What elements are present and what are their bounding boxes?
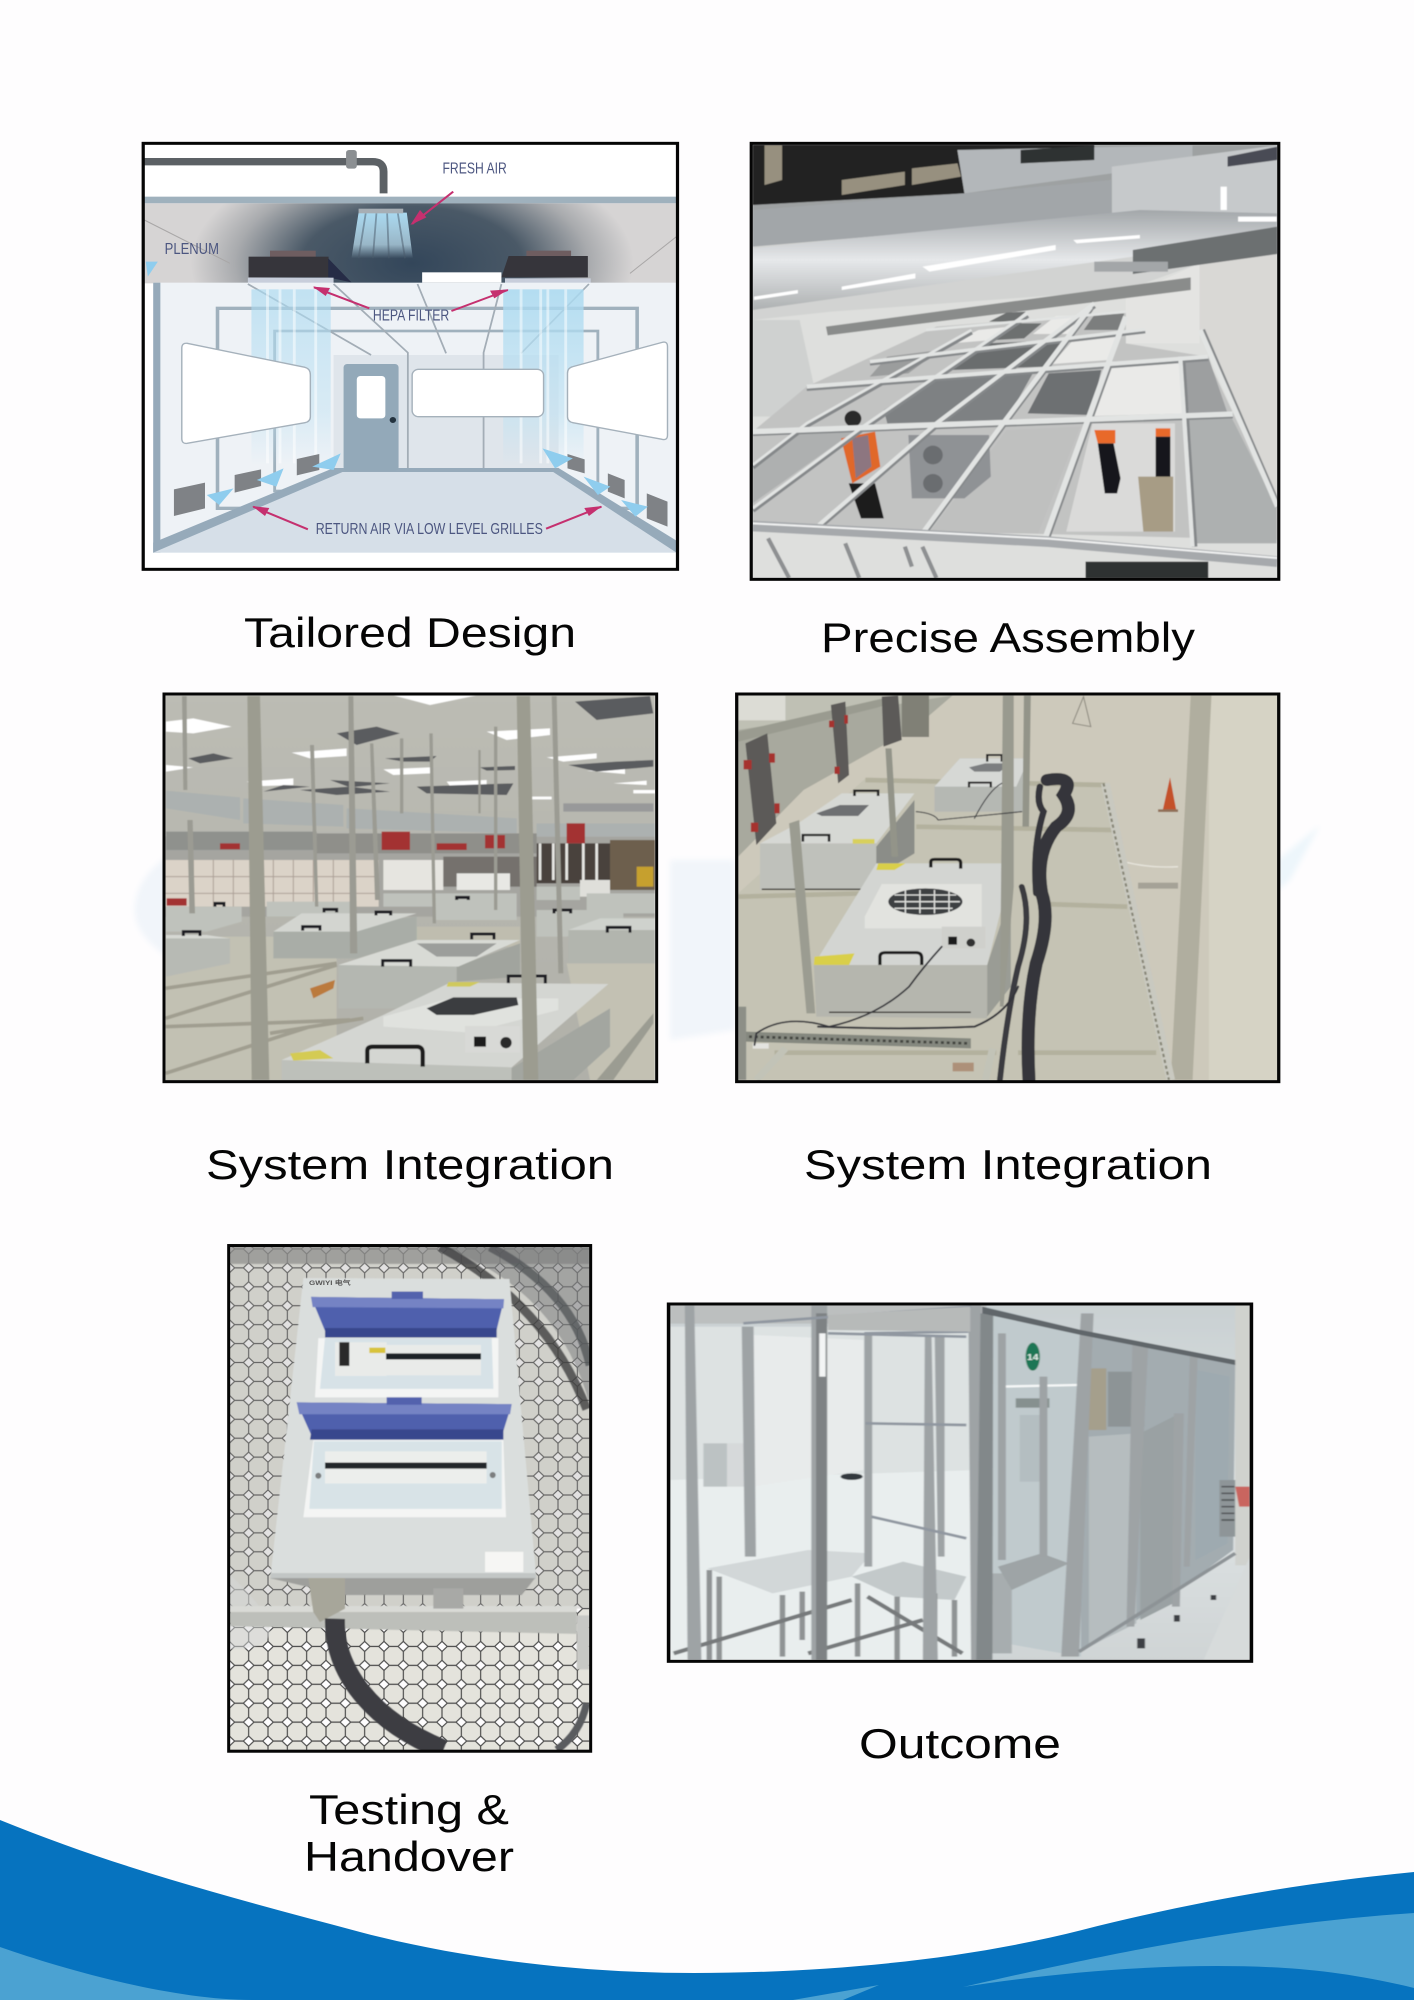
- bundled cables: [755, 779, 1068, 1080]
- background watermark: [135, 823, 1320, 1054]
- diagram labels: HEPA FILTER: [373, 306, 449, 325]
- footer wave: [0, 1820, 1414, 2000]
- caption: Testing and Handover: Testing &: [309, 1786, 509, 1833]
- aluminium grid profiles: [753, 303, 1277, 547]
- front filter unit: [814, 965, 987, 1018]
- photo: fan filter units in factory hall: [164, 694, 657, 1082]
- photo: finished softwall cleanroom: [669, 1304, 1251, 1661]
- cells seen through the grid: [753, 312, 1277, 540]
- far filter unit: [934, 758, 1029, 812]
- foreground filter unit: [336, 1062, 512, 1080]
- photo: fan filter units with cabling: [737, 694, 1279, 1082]
- ceiling services: [752, 145, 1277, 210]
- return grilles: [174, 454, 667, 527]
- caption: Testing and Handover: [304, 1786, 514, 1880]
- aluminium grid shadow: [753, 306, 1279, 547]
- door: [344, 364, 399, 471]
- diagram labels: RETURN AIR VIA LOW LEVEL GRILLES: [316, 520, 543, 538]
- maker logo: GWIYI 电气: [309, 1279, 351, 1287]
- caption: Precise Assembly: Precise Assembly: [821, 614, 1195, 661]
- caption: Testing and Handover: Handover: [304, 1833, 514, 1880]
- caption: Tailored Design: Tailored Design: [244, 609, 576, 656]
- windows: [182, 343, 310, 443]
- aluminium uprights: [685, 1305, 1198, 1660]
- background filter units: [166, 887, 655, 937]
- posts: [247, 696, 538, 1080]
- machine below: [908, 435, 991, 498]
- back wall and shelving: [165, 837, 655, 917]
- busway at top-left: [738, 695, 953, 857]
- posts: [1000, 695, 1014, 1007]
- suspended lamp: [826, 277, 1191, 335]
- busway: [166, 791, 655, 853]
- photo: cleanroom airflow diagram: [143, 143, 677, 569]
- wall mounted box: [1086, 1368, 1106, 1430]
- enclosure side panels: [986, 1307, 1081, 1657]
- hall walls and floor: [670, 1327, 986, 1480]
- mounting rail: [230, 1606, 577, 1634]
- diagram labels: [165, 159, 543, 538]
- curtain shine and shadow: [443, 1247, 590, 1406]
- perforated rail: [745, 1032, 971, 1048]
- interior door and sign: [1020, 1415, 1045, 1482]
- ceiling lights and openings: [166, 695, 655, 799]
- floor tray frame: [738, 778, 1171, 1080]
- workers: [841, 411, 1173, 532]
- air curtains: [251, 289, 331, 466]
- floor: [165, 937, 337, 1080]
- caption: System Integration right: System Integration: [804, 1141, 1212, 1188]
- hepa filter units: [248, 251, 591, 284]
- upper breaker panel: [311, 1292, 504, 1397]
- diagram labels: FRESH AIR: [442, 159, 507, 177]
- room walls: [153, 283, 676, 553]
- rating label: [485, 1552, 523, 1572]
- return air arrows: [146, 262, 648, 517]
- walls: [753, 253, 1277, 578]
- caption: Outcome: Outcome: [859, 1720, 1061, 1767]
- photo: distribution box on ESD curtain: [229, 1246, 591, 1751]
- photo: ceiling grid assembly: [751, 143, 1279, 579]
- box body: [271, 1278, 536, 1575]
- worktables: [674, 1550, 1069, 1660]
- right wall and column: [1209, 695, 1278, 1081]
- middle filter unit: [760, 843, 876, 890]
- white closed panels: [950, 315, 1184, 532]
- icon: fresh air pipe: [144, 162, 384, 193]
- casters: [1137, 1595, 1216, 1648]
- cable gland and cable: [308, 1578, 345, 1622]
- traffic cone: [1163, 777, 1176, 810]
- plenum: [144, 203, 676, 283]
- lower breaker panel: [297, 1397, 512, 1517]
- photo: finished softwall cleanroom: 14: [1027, 1353, 1039, 1363]
- mid filter units: [166, 938, 230, 977]
- handles: [183, 897, 630, 984]
- bright duct band: [753, 210, 1277, 310]
- pink leader arrows: [253, 192, 601, 529]
- floor: [153, 470, 676, 553]
- caption: System Integration left: System Integration: [206, 1141, 614, 1188]
- galvanised beam: [1133, 227, 1277, 274]
- below rail: [1086, 562, 1208, 578]
- diagram labels: PLENUM: [165, 240, 219, 258]
